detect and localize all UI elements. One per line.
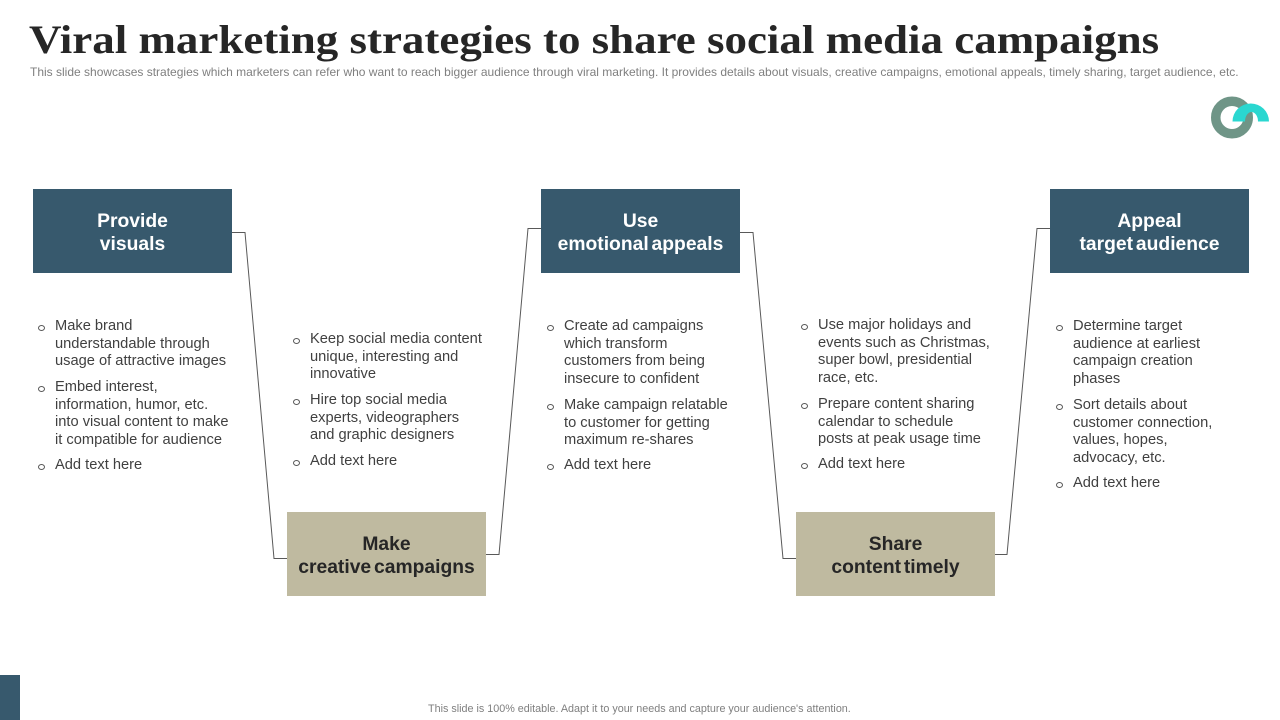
box: Use emotional appeals: emotional appeals [558,234,723,254]
icon: logo rings [1211,96,1269,138]
text block: Use emotional appeals bullets: to customer for getting [564,415,710,431]
text block: Share content timely bullets: Use major holidays and [818,317,971,333]
text block: Provide visuals bullets: into visual content to make [55,414,229,430]
text block: Provide visuals bullets: it compatible for audience [55,432,222,448]
text block: Make creative campaigns bullets: experts, videographers [310,410,459,426]
text block: Share content timely bullets: events such as Christmas, [818,335,990,351]
box: Appeal target audience: Appeal [1117,210,1182,232]
text block: Share content timely bullets: super bowl, presidential [818,352,972,368]
box: Share content timely: content timely [831,556,960,578]
text block: Appeal target audience bullets: values, hopes, [1073,432,1168,448]
text block: Appeal target audience bullets [1056,318,1212,491]
text block: Use emotional appeals bullets: insecure to confident [564,371,699,387]
box: Appeal target audience: target audience [1079,234,1220,254]
box: Provide visuals: visuals [100,234,165,254]
text block: Appeal target audience bullets: customer connection, [1073,415,1212,431]
text block: Make creative campaigns bullets: Keep social media content [310,331,482,347]
text block: Use emotional appeals bullets: Create ad campaigns [564,318,703,334]
box: Provide visuals: Provide [97,210,168,232]
title: Viral marketing strategies to share social media campaigns [29,17,1159,62]
box: Share content timely [796,512,995,596]
text block: Use emotional appeals bullets: customers from being [564,353,705,369]
text block: Share content timely bullets: Prepare content sharing [818,396,974,412]
box: Appeal target audience [1050,189,1249,273]
text block: Appeal target audience bullets: audience at earliest [1073,336,1200,352]
text block: Make creative campaigns bullets: innovative [310,366,376,382]
text block: Share content timely bullets: race, etc. [818,370,878,386]
text block: Use emotional appeals bullets: maximum re-shares [564,432,694,448]
text block: Use emotional appeals bullets: Make campaign relatable [564,397,728,413]
text block: Appeal target audience bullets: Determine target [1073,318,1182,334]
box: Make creative campaigns: Make [362,534,411,554]
text block: Use emotional appeals bullets: Add text here [564,457,651,473]
text block: Share content timely bullets: Add text here [818,456,905,472]
text block: Appeal target audience bullets: Add text here [1073,475,1160,491]
text block: Appeal target audience bullets: campaign creation [1073,353,1193,369]
box: Make creative campaigns: creative campaigns [298,556,475,578]
text block: Make creative campaigns bullets: Add text here [310,453,397,469]
text block: Make creative campaigns bullets: Hire top social media [310,392,447,408]
subtitle: This slide showcases strategies which marketers can refer who want to reach bigger audience through viral marketing. It provides details about visuals, creative campaigns, emotional appeals, timely sharing, target audience, etc. [30,65,1239,79]
box: Share content timely: Share [869,534,922,554]
text block: Appeal target audience bullets: phases [1073,371,1120,387]
text block: Provide visuals bullets: information, humor, etc. [55,397,208,413]
text block: Provide visuals bullets: understandable through [55,336,210,352]
text block: Share content timely bullets [801,317,990,472]
text block: Share content timely bullets: posts at peak usage time [818,431,981,447]
text block: Make creative campaigns bullets [293,331,482,469]
corner accent block [0,675,20,720]
text block: Use emotional appeals bullets [547,318,728,473]
footer note: This slide is 100% editable. Adapt it to your needs and capture your audience's attention. [428,703,851,715]
box: Use emotional appeals: Use [623,210,658,232]
text block: Provide visuals bullets: Make brand [55,318,132,334]
text block: Appeal target audience bullets: Sort details about [1073,397,1187,413]
text block: Provide visuals bullets: usage of attractive images [55,353,226,369]
text block: Share content timely bullets: calendar to schedule [818,414,953,430]
text block: Provide visuals bullets: Embed interest, [55,379,158,395]
box: Make creative campaigns [287,512,486,596]
text block: Provide visuals bullets: Add text here [55,457,142,473]
text block: Make creative campaigns bullets: unique, interesting and [310,349,458,365]
box: Provide visuals [33,189,232,273]
text block: Provide visuals bullets [38,318,229,473]
text block: Appeal target audience bullets: advocacy, etc. [1073,450,1166,466]
text block: Make creative campaigns bullets: and graphic designers [310,427,454,443]
text block: Use emotional appeals bullets: which transform [564,336,667,352]
box: Use emotional appeals [541,189,740,273]
